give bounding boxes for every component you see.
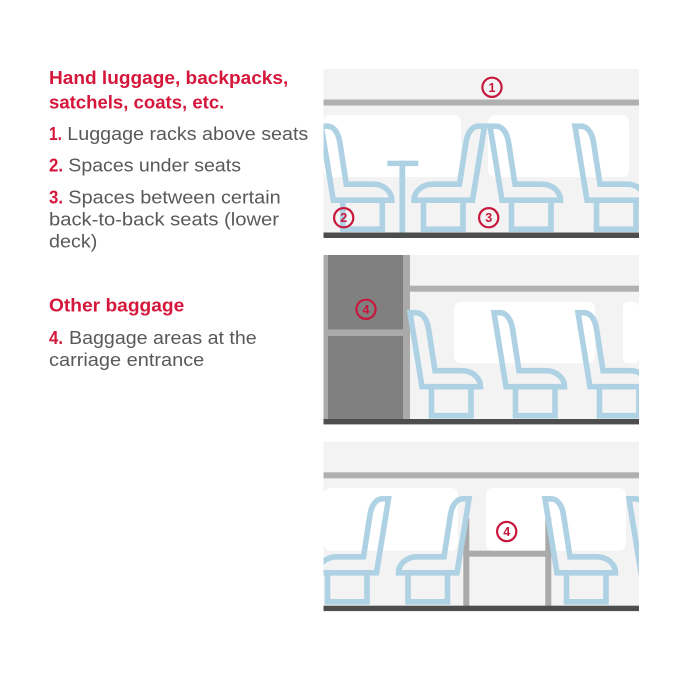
luggage rack [324,472,639,478]
marker 2: 2 [340,211,347,225]
table [387,161,418,233]
list item 3: 3. [49,187,63,207]
text block: other baggage [49,296,257,370]
list item 1: 1. [49,124,62,144]
list item 3: back-to-back seats (lower [49,210,279,230]
heading: hand luggage: Hand luggage, backpacks, [49,68,288,88]
heading: hand luggage [49,68,288,112]
marker 4 [497,522,516,541]
list item 1: Luggage racks above seats [67,124,308,144]
list item 3: deck) [49,232,97,252]
marker 1 [482,78,502,97]
baggage area [324,255,410,420]
list item 3 [49,187,281,252]
panel: baggage area between seats [324,442,639,612]
list item 4: carriage entrance [49,350,204,370]
panel: carriage entrance baggage area [324,255,648,424]
heading: hand luggage: satchels, coats, etc. [49,92,224,112]
seats [410,313,648,416]
luggage rack [408,286,639,292]
marker 1: 1 [489,81,496,95]
luggage rack [324,100,639,106]
floor [324,419,639,424]
marker 3 [479,208,498,227]
seats [321,126,646,229]
floor [324,232,639,238]
panel: carriage with racks and under-seat spaces [321,69,646,238]
text block: hand luggage [49,68,308,252]
marker 3: 3 [485,211,492,225]
marker 2 [334,208,353,227]
marker 4: 4 [503,525,510,539]
marker 4 [356,300,376,319]
list item 2: 2. [49,156,63,176]
list item 2: Spaces under seats [68,156,241,176]
baggage partitions [463,518,551,606]
list item 4 [49,328,257,370]
heading: other baggage: Other baggage [49,296,184,316]
list item 3: Spaces between certain [68,187,281,207]
marker 4: 4 [363,303,370,317]
floor [324,606,639,611]
list item 4: 4. [49,328,63,348]
list item 4: Baggage areas at the [69,328,257,348]
seats [318,499,680,602]
